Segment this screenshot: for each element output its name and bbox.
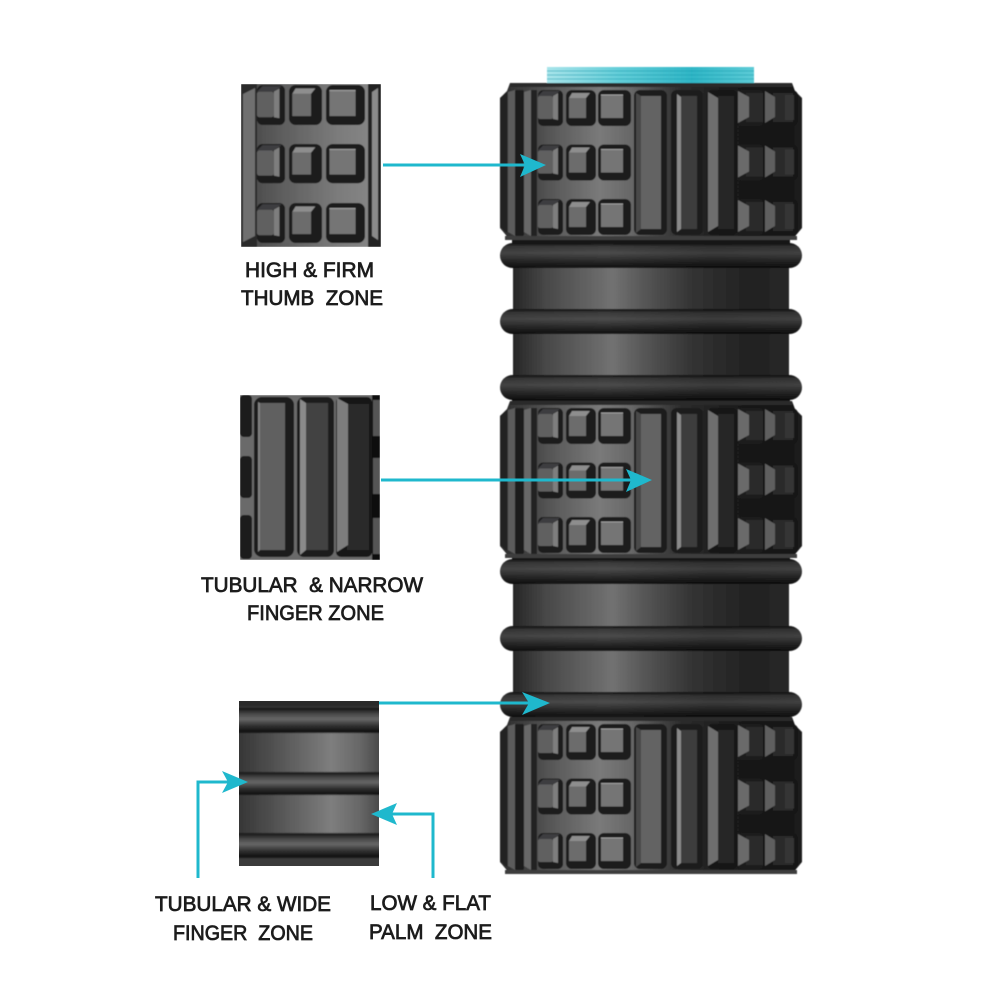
arrow: palm zone on roller bbox=[379, 692, 550, 715]
label: tubular and narrow finger zone: FINGER ZONE bbox=[247, 602, 384, 625]
panel: thumb zone detail bbox=[241, 84, 381, 247]
panel: finger zone detail bbox=[240, 395, 380, 560]
grip section top bbox=[500, 83, 802, 240]
foam roller product bbox=[500, 67, 802, 874]
label: high and firm thumb zone: THUMB ZONE bbox=[241, 287, 383, 310]
label: high and firm thumb zone: HIGH & FIRM bbox=[245, 259, 374, 282]
label: tubular and narrow finger zone: TUBULAR & NARROW bbox=[201, 574, 423, 597]
dark core behind sections bbox=[512, 236, 790, 723]
arrow: thumb zone bbox=[383, 154, 546, 177]
label: low and flat palm zone: PALM ZONE bbox=[369, 921, 492, 944]
smooth section upper bbox=[500, 243, 802, 400]
arrow: low palm zone bbox=[371, 803, 433, 878]
label: low and flat palm zone bbox=[369, 892, 492, 944]
grip section bottom bbox=[500, 717, 802, 874]
label: high and firm thumb zone bbox=[241, 259, 383, 310]
panel: smooth zone detail bbox=[239, 701, 379, 866]
arrow: wide finger zone bbox=[198, 771, 248, 878]
label: tubular and wide finger zone: FINGER ZONE bbox=[173, 922, 313, 945]
teal threaded core bbox=[547, 67, 754, 84]
label: low and flat palm zone: LOW & FLAT bbox=[370, 892, 491, 915]
smooth section lower bbox=[500, 559, 802, 717]
label: tubular and wide finger zone: TUBULAR & WIDE bbox=[155, 893, 331, 916]
arrow: narrow finger zone bbox=[381, 469, 652, 492]
label: tubular and narrow finger zone bbox=[201, 574, 423, 625]
grip section middle bbox=[500, 401, 802, 558]
label: tubular and wide finger zone bbox=[155, 893, 331, 945]
